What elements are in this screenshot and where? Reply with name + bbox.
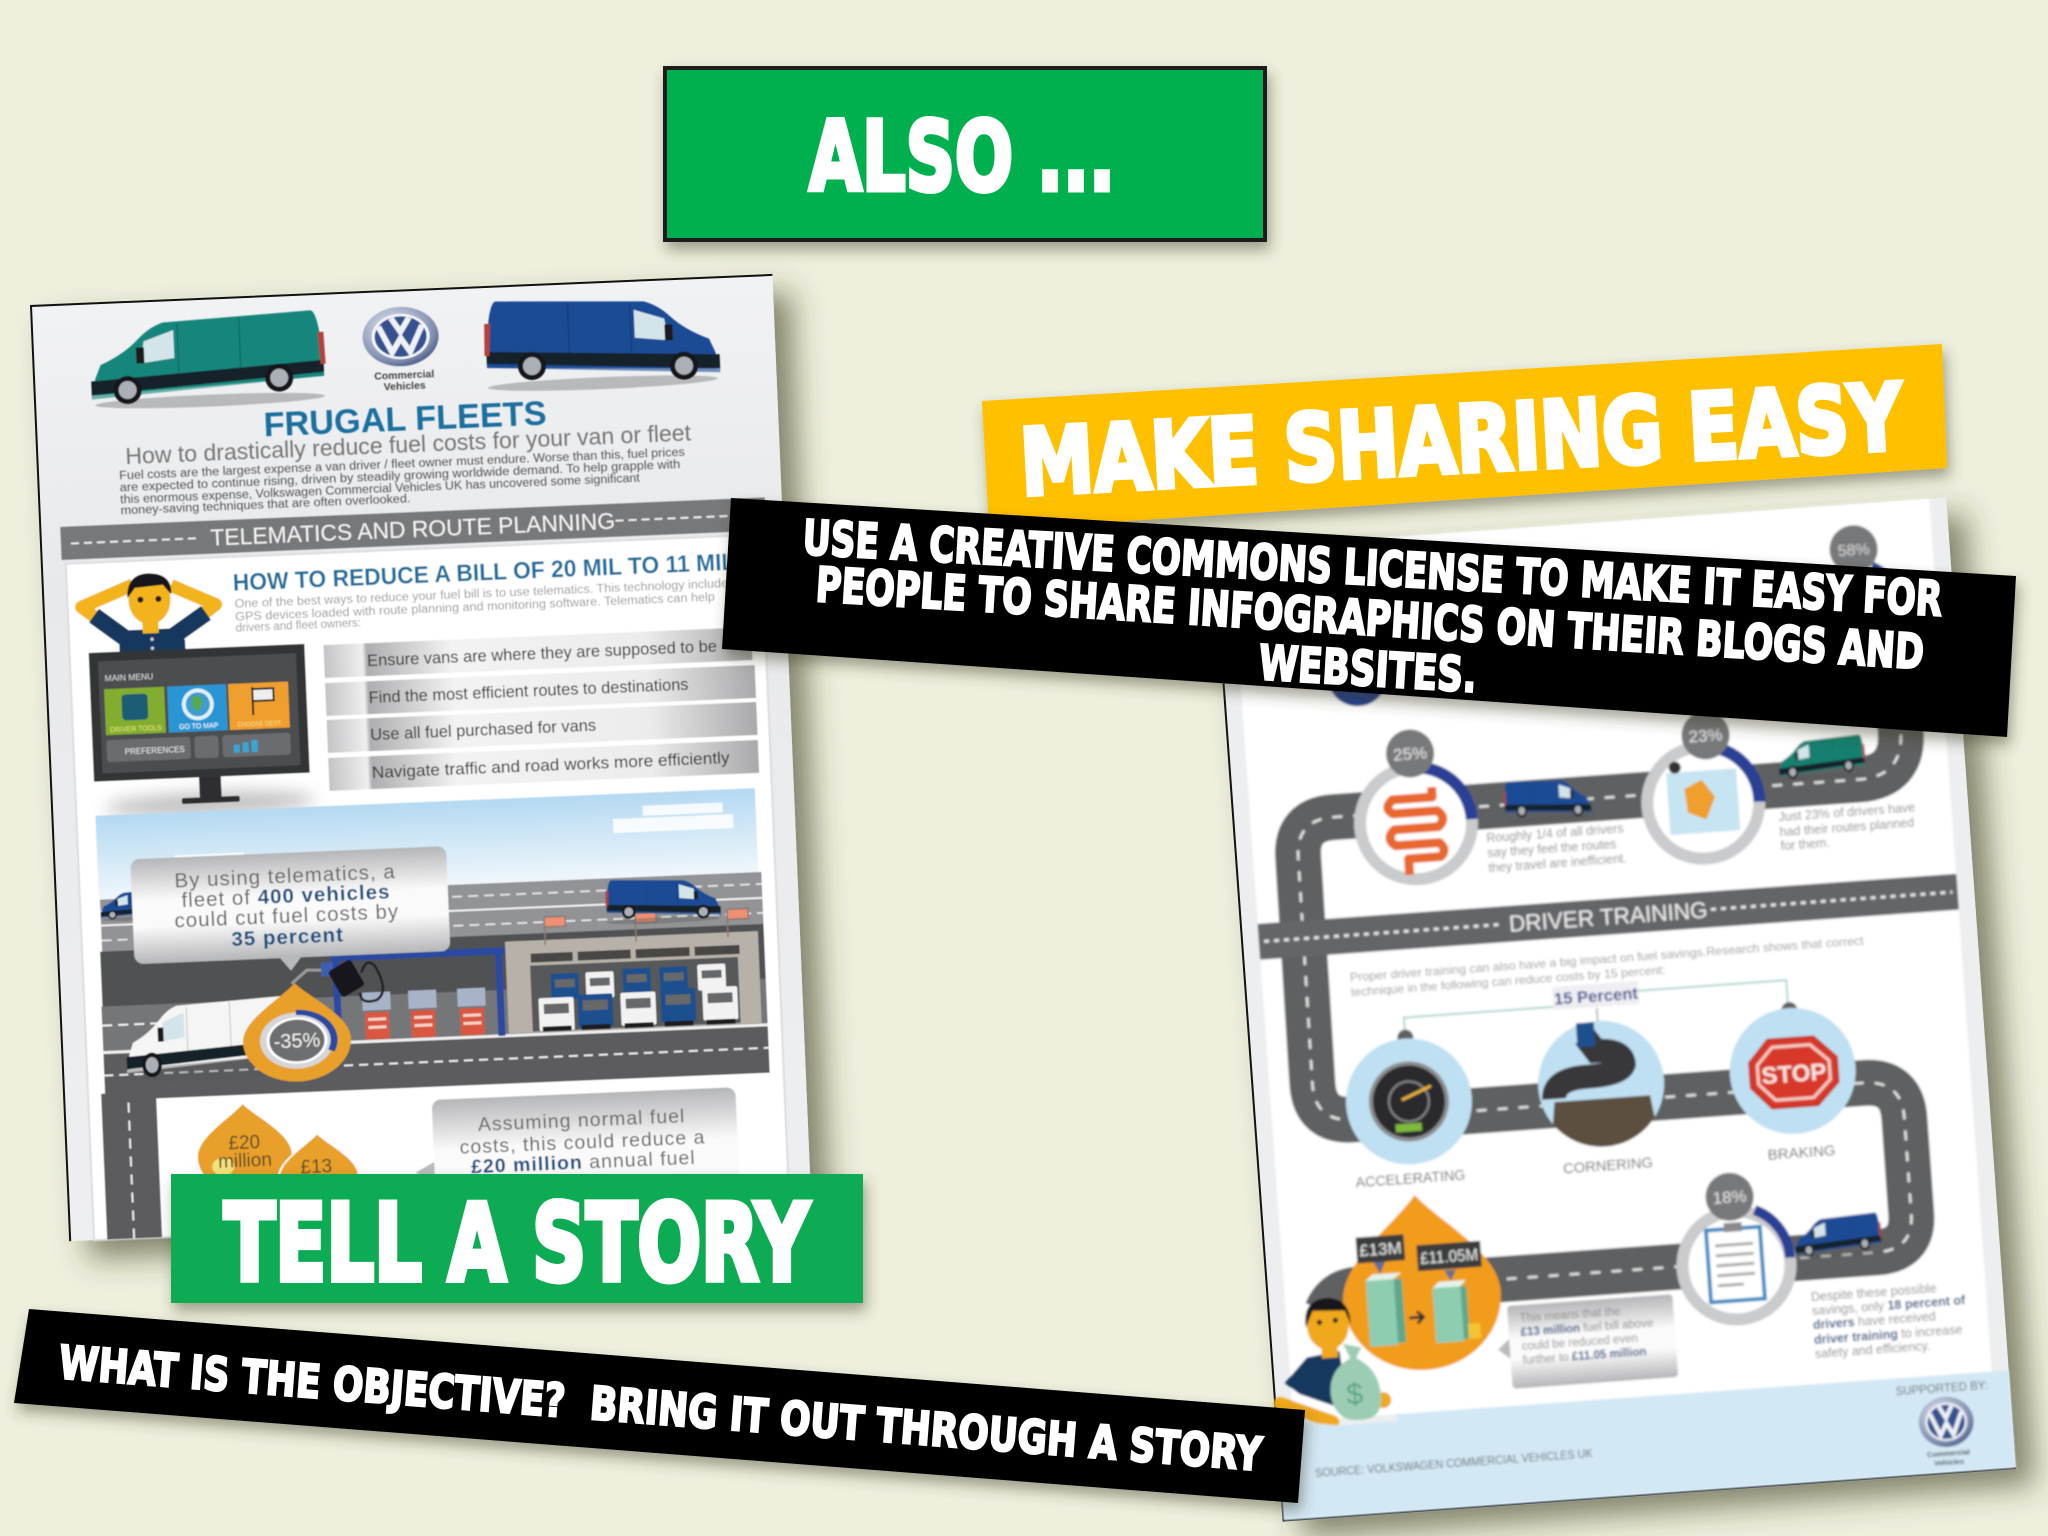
intro paragraph: are expected to continue rising, driven by steadily growing worldwide demand. To help grapple with: [119, 459, 680, 494]
icon: green van on route: [1777, 734, 1867, 782]
footer logo caption two: Vehicles: [1934, 1457, 1964, 1468]
callout: £13 million reduced: further to £11.05 million: [1522, 1346, 1647, 1367]
banner: tell a story: [171, 1174, 863, 1305]
illustration: worried man: [80, 571, 218, 666]
stat: 18% trained drivers: [1676, 1169, 1794, 1323]
callout: assuming normal fuel costs: [413, 1087, 741, 1227]
icon: small blue van behind callout: [100, 888, 178, 922]
stat: 23% planned routes: 23%: [1688, 725, 1723, 747]
intro paragraph: this enormous expense, Volkswagen Commercial Vehicles UK has uncovered some significant: [120, 473, 641, 506]
list: telematics benefits: Use all fuel purchased for vans: [370, 716, 596, 744]
illustration: winding road: [1284, 672, 1939, 1312]
callout: telematics saving: By using telematics, a: [174, 860, 396, 892]
panel: telematics content: [66, 535, 790, 1240]
illustration: sat-nav monitor: MAIN MENU: [104, 671, 153, 683]
telematics paragraph: One of the best ways to reduce your fuel bill is to use telematics. This technology includes: [234, 578, 735, 611]
section banner: driver training: [1258, 874, 1959, 960]
label: accelerating: ACCELERATING: [1355, 1168, 1466, 1191]
illustration: sky with clouds: [95, 788, 759, 906]
icon: £20 million drop: million: [218, 1150, 272, 1173]
telematics paragraph: drivers and fleet owners:: [235, 617, 361, 635]
list: telematics benefits: Find the most efficient routes to destinations: [368, 675, 689, 707]
callout: assuming normal fuel costs: £20 million annual fuel: [471, 1147, 696, 1178]
telematics paragraph: GPS devices loaded with route planning and monitoring software. Telematics can help: [235, 592, 715, 624]
caption: 18 percent: drivers have received: [1812, 1309, 1936, 1332]
illustration: sat-nav monitor: DRIVER TOOLS: [110, 725, 162, 734]
icon: -35% fuel drop: -35%: [273, 1030, 321, 1053]
illustration: sat-nav monitor: PREFERENCES: [125, 745, 185, 756]
logo caption: Commercial: [374, 368, 435, 383]
illustration: sat-nav monitor: GO TO MAP: [179, 723, 219, 731]
icon: braking stop sign: [1725, 1004, 1860, 1138]
caption: 25%: they travel are inefficient.: [1488, 851, 1627, 875]
icon: blue van on motorway: [604, 876, 721, 926]
connector: 15 percent: [1395, 970, 1798, 1051]
illustration: savings drop with cash: £11.05M: [1420, 1245, 1479, 1268]
strip: creative commons advice: [722, 498, 2016, 737]
callout: telematics saving: could cut fuel costs by: [174, 900, 400, 933]
illustration: man with money bag: $: [1345, 1378, 1365, 1412]
illustration: savings drop with cash: [1336, 1189, 1506, 1376]
icon: -35% fuel drop: [241, 981, 353, 1084]
intro paragraph: [119, 447, 687, 517]
training paragraph: Proper driver training can also have a big impact on fuel savings.Research shows that correct: [1349, 934, 1865, 984]
callout: £13 million reduced: could be reduced even: [1521, 1333, 1638, 1353]
callout: assuming normal fuel costs: costs, this could reduce a: [459, 1126, 706, 1159]
caption: 25%: Roughly 1/4 of all drivers: [1486, 821, 1624, 845]
label: cornering: CORNERING: [1563, 1155, 1654, 1178]
heading box: also: [665, 68, 1265, 240]
callout: telematics saving: fleet of 400 vehicles: [181, 880, 391, 912]
icon: £13 million drop: £13: [300, 1156, 333, 1178]
caption: 18 percent: savings, only 18 percent of: [1811, 1293, 1966, 1318]
panel: frugal fleets infographic page: [31, 275, 812, 1241]
stat: 58% of drivers: [1319, 522, 1906, 708]
intro paragraph: money-saving techniques that are often overlooked.: [120, 493, 411, 517]
icon: blue van on route: [1502, 776, 1592, 824]
training paragraph: technique in the following can reduce costs by 15 percent:: [1350, 963, 1666, 999]
callout: £13 million reduced: [1495, 1294, 1678, 1390]
icon: £20 million drop: [196, 1102, 293, 1195]
stat: 18% trained drivers: 18%: [1712, 1187, 1747, 1208]
label: braking: BRAKING: [1767, 1143, 1836, 1164]
caption: 25%: say they feel the routes: [1487, 837, 1617, 860]
heading box: also: ALSO ...: [809, 101, 1115, 213]
icon: £20 million drop: £20: [228, 1132, 261, 1154]
stat: 25% inefficient routes: [1353, 725, 1476, 883]
icon: VW logo footer: [1917, 1395, 1975, 1449]
caption: 23%: for them.: [1780, 836, 1830, 853]
strip: objective: [14, 1309, 1305, 1503]
stat: 58% of drivers: 58%: [1837, 541, 1870, 560]
panel: driver training infographic page: [1214, 498, 2016, 1521]
caption: 18 percent: [1810, 1279, 1970, 1361]
illustration: motorway and depot: [93, 872, 776, 1240]
connector: 15 percent: 15 Percent: [1553, 984, 1639, 1009]
callout: £13 million reduced: This means that the: [1519, 1306, 1621, 1325]
section banner: telematics: [60, 497, 766, 560]
caption: 23%: Just 23% of drivers have: [1778, 801, 1916, 824]
icon: blue van near finish: [1793, 1212, 1883, 1261]
list: telematics benefits: Ensure vans are where they are supposed to be: [367, 637, 717, 670]
callout: telematics saving: 35 percent: [231, 923, 344, 951]
strip: objective: WHAT IS THE OBJECTIVE? BRING IT OUT THROUGH A STORY: [57, 1335, 1264, 1482]
icon: blue van: [482, 292, 721, 394]
icon: VW logo: [361, 305, 440, 368]
intro paragraph: Fuel costs are the largest expense a van driver / fleet owner must endure. Worse than this, fuel prices: [119, 447, 685, 482]
strip: creative commons advice: WEBSITES.: [1257, 635, 1478, 704]
icon: £13 million drop: [277, 1132, 360, 1209]
illustration: depot building with vans: [504, 908, 762, 1034]
icon: cornering bends: [1534, 1016, 1668, 1151]
logo caption line two: Vehicles: [383, 380, 426, 393]
heading: how to reduce: HOW TO REDUCE A BILL OF 20 MIL TO 11 MIL: [232, 549, 736, 597]
list: telematics benefits: Navigate traffic and road works more efficiently: [371, 748, 730, 782]
illustration: sat-nav monitor: [89, 644, 315, 821]
caption: 18 percent: safety and efficiency.: [1815, 1339, 1931, 1361]
list: telematics benefits: [323, 627, 759, 791]
title: FRUGAL FLEETS: [263, 395, 547, 444]
caption: 18 percent: Despite these possible: [1810, 1281, 1937, 1304]
footer logo caption: Commercial: [1927, 1447, 1970, 1459]
icon: accelerating speedometer: [1342, 1034, 1476, 1169]
caption: 23%: [1778, 801, 1918, 853]
icon: green van: [89, 310, 327, 412]
caption: 18 percent: driver training to increase: [1814, 1323, 1963, 1347]
stat: 25% inefficient routes: 25%: [1392, 743, 1428, 765]
icon: white van: [124, 996, 292, 1084]
banner: tell a story: TELL A STORY: [224, 1182, 810, 1305]
illustration: sat-nav monitor: CHOOSE DEST.: [237, 721, 283, 729]
panel: route content: [1231, 499, 1992, 1422]
section banner: driver training: DRIVER TRAINING: [1508, 897, 1708, 937]
callout: £13 million reduced: £13 million fuel bill above: [1520, 1318, 1654, 1339]
illustration: savings drop with cash: £13M: [1359, 1238, 1402, 1260]
illustration: man with money bag: [1273, 1294, 1392, 1426]
subtitle: How to drastically reduce fuel costs for your van or fleet: [125, 419, 692, 469]
caption: 25%: [1486, 821, 1627, 875]
panel: footer: [1277, 1370, 2016, 1521]
callout: assuming normal fuel costs: Assuming normal fuel: [477, 1105, 686, 1136]
source line: SOURCE: VOLKSWAGEN COMMERCIAL VEHICLES UK: [1315, 1446, 1593, 1480]
caption: 23%: had their routes planned: [1779, 816, 1915, 839]
callout: telematics saving: [130, 846, 451, 977]
stat: 23% planned routes: [1641, 708, 1763, 863]
icon: fuel station canopy and pumps: [291, 951, 508, 1045]
supported by: SUPPORTED BY:: [1895, 1380, 1988, 1398]
section banner: telematics: TELEMATICS AND ROUTE PLANNING: [210, 508, 616, 551]
telematics paragraph: [234, 578, 736, 635]
icon: braking stop sign: STOP: [1761, 1059, 1827, 1090]
